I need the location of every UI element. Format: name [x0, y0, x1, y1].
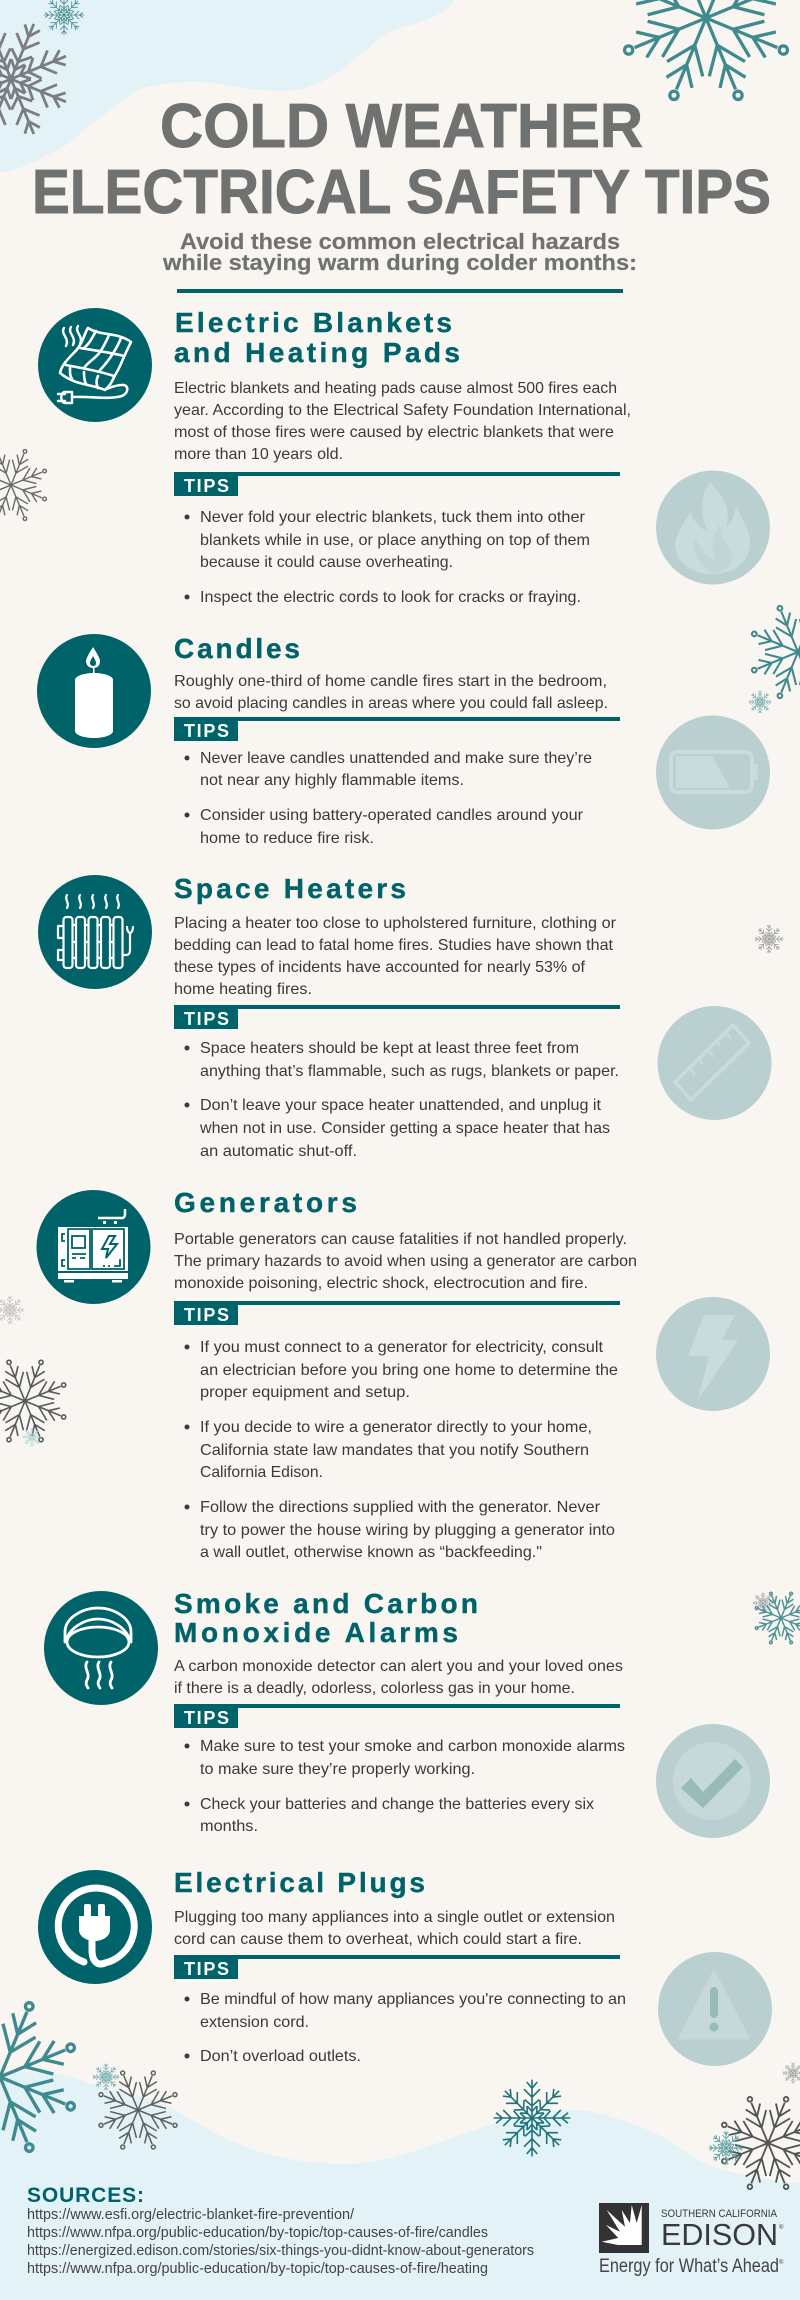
snowflake: right small grey upper [752, 1592, 774, 1614]
body text: Portable generators can cause fatalities if not handled properly. [174, 1231, 627, 1248]
tips list: proper equipment and setup. [200, 1384, 410, 1401]
snowflake: right small teal [748, 690, 772, 714]
snowflake: far right small grey [782, 2062, 800, 2084]
tips list: to make sure they’re properly working. [200, 1761, 475, 1778]
snowflake: top right teal [591, 0, 800, 133]
body text: so avoid placing candles in areas where you could fall asleep. [174, 695, 608, 712]
tips label: TIPS [184, 1959, 229, 1979]
heading: Electrical Plugs [174, 1867, 425, 1898]
tips list: anything that’s flammable, such as rugs, blankets or paper. [200, 1063, 619, 1080]
tips label [174, 1704, 620, 1728]
tips list [184, 1040, 619, 1160]
tips list: Follow the directions supplied with the generator. Never [200, 1499, 601, 1516]
tips list [184, 1339, 618, 1561]
icon: generator [36, 1190, 150, 1304]
snowflake: bottom grey [83, 2055, 193, 2165]
body text: Roughly one-third of home candle fires start in the bedroom, [174, 673, 607, 690]
panel: electric blankets [38, 307, 770, 606]
tips label: TIPS [184, 721, 229, 741]
tips list: months. [200, 1818, 258, 1835]
snowflake: right teal [733, 587, 800, 717]
panel: electrical plugs [38, 1867, 772, 2066]
sources: https://www.nfpa.org/public-education/by-topic/top-causes-of-fire/heating [27, 2261, 488, 2277]
tips list: not near any highly flammable items. [200, 772, 464, 789]
tips label [174, 1955, 620, 1979]
snowflake: bottom middle teal [494, 2080, 570, 2156]
tips list: Inspect the electric cords to look for cracks or fraying. [200, 589, 581, 606]
tips list: California state law mandates that you notify Southern [200, 1442, 589, 1459]
logo: Southern California Edison: SOUTHERN CALIFORNIA [661, 2208, 778, 2220]
body text: year. According to the Electrical Safety Foundation International, [174, 402, 631, 419]
icon: plug [38, 1870, 152, 1984]
body text: most of those fires were caused by electric blankets that were [174, 424, 614, 441]
tips list: Space heaters should be kept at least three feet from [200, 1040, 579, 1057]
tips label: TIPS [184, 1305, 229, 1325]
logo: Southern California Edison [599, 2203, 784, 2277]
tips list: an automatic shut-off. [200, 1143, 357, 1160]
body text: these types of incidents have accounted for nearly 53% of [174, 959, 586, 976]
body text: Plugging too many appliances into a single outlet or extension [174, 1909, 615, 1926]
icon: candle [37, 634, 151, 748]
body text [174, 673, 608, 712]
panel: generators [36, 1187, 770, 1561]
heading: Smoke and Carbon [174, 1588, 478, 1619]
panel: space heaters [38, 873, 772, 1160]
tips list: when not in use. Consider getting a space heater that has [199, 1120, 610, 1137]
body text: A carbon monoxide detector can alert you and your loved ones [174, 1658, 623, 1675]
tips label [174, 472, 620, 496]
tips list: because it could cause overheating. [200, 554, 453, 571]
tips label [174, 717, 620, 741]
tips list: Consider using battery-operated candles around your [200, 807, 584, 824]
subtitle [162, 229, 637, 275]
body text: home heating fires. [174, 981, 312, 998]
background: bottom blue wave [0, 2072, 800, 2300]
heading: Candles [174, 633, 300, 664]
logo: Southern California Edison: EDISON [661, 2217, 778, 2252]
icon: smoke alarm [44, 1591, 158, 1705]
tips label: TIPS [184, 1708, 229, 1728]
snowflake: right small grey [755, 925, 783, 953]
tips list: a wall outlet, otherwise known as “backfeeding." [200, 1544, 542, 1561]
tips label [174, 1005, 620, 1029]
icon: warning triangle [658, 1952, 772, 2066]
snowflake: bottom left teal [0, 1972, 105, 2182]
tips list: Never fold your electric blankets, tuck them into other [200, 509, 586, 526]
tips list [184, 509, 590, 606]
background: top blue blob [0, 0, 454, 173]
logo: Southern California Edison: ® [779, 2224, 784, 2231]
tips list: Be mindful of how many appliances you're connecting to an [200, 1991, 626, 2008]
tips list: Never leave candles unattended and make sure they’re [200, 750, 592, 767]
icon: flame [656, 470, 770, 584]
snowflake: left small teal [22, 1427, 42, 1447]
heading: Monoxide Alarms [174, 1617, 458, 1648]
body text: Electric blankets and heating pads cause almost 500 fires each [174, 380, 617, 397]
heading: Generators [174, 1187, 357, 1218]
snowflake: bottom small teal [93, 2064, 119, 2090]
tips list: California Edison. [200, 1464, 323, 1481]
title [32, 92, 771, 227]
body text: Placing a heater too close to upholstered furniture, clothing or [174, 915, 617, 932]
icon: radiator [38, 875, 152, 989]
heading [174, 307, 460, 368]
tips list: Make sure to test your smoke and carbon monoxide alarms [200, 1738, 625, 1755]
body text [174, 1231, 637, 1292]
snowflake: bottom right small teal [709, 2131, 743, 2165]
icon: lightning bolt [656, 1297, 770, 1411]
tips list: try to power the house wiring by plugging a generator into [200, 1522, 615, 1539]
body text: bedding can lead to fatal home fires. Studies have shown that [174, 937, 614, 954]
subtitle: Avoid these common electrical hazards [180, 229, 620, 254]
icon: check mark [656, 1724, 770, 1838]
heading: and Heating Pads [174, 337, 460, 368]
heading: Electric Blankets [175, 307, 452, 338]
body text: The primary hazards to avoid when using a generator are carbon [174, 1253, 637, 1270]
tips list: Check your batteries and change the batteries every six [200, 1796, 594, 1813]
sources: https://www.esfi.org/electric-blanket-fire-prevention/ [27, 2207, 355, 2223]
snowflake: left grey [0, 435, 61, 535]
tips list: If you must connect to a generator for electricity, consult [200, 1339, 604, 1356]
body text: cord can cause them to overheat, which could start a fire. [174, 1931, 582, 1948]
tips label: TIPS [184, 476, 229, 496]
tips list: an electrician before you bring one home to determine the [200, 1362, 618, 1379]
heading: Space Heaters [174, 873, 406, 904]
snowflake: right teal lower [745, 1582, 800, 1654]
tips list: If you decide to wire a generator directly to your home, [200, 1419, 592, 1436]
snowflake: top left grey [0, 1, 89, 157]
icon: electric blanket [38, 308, 152, 422]
body text [174, 1658, 623, 1697]
sources [27, 2184, 534, 2277]
tips label: TIPS [184, 1009, 229, 1029]
sources: SOURCES: [27, 2184, 144, 2207]
snowflake: bottom right grey [703, 2078, 800, 2208]
panel: alarms [44, 1588, 770, 1838]
heading [174, 1588, 478, 1648]
tips label [174, 1301, 620, 1325]
tips list: blankets while in use, or place anything on top of them [200, 532, 590, 549]
tips list [184, 750, 592, 847]
icon: ruler [658, 1006, 772, 1120]
body text [174, 380, 631, 463]
body text: more than 10 years old. [174, 446, 343, 463]
body text [174, 915, 617, 998]
body text: if there is a deadly, odorless, colorless gas in your home. [174, 1680, 575, 1697]
tips list [184, 1738, 625, 1835]
tips list: home to reduce fire risk. [200, 830, 374, 847]
sources: https://energized.edison.com/stories/six-things-you-didnt-know-about-generators [27, 2243, 534, 2259]
body text: monoxide poisoning, electric shock, electrocution and fire. [174, 1275, 588, 1292]
subtitle: while staying warm during colder months: [162, 250, 637, 275]
panel: candles [37, 633, 770, 847]
icon: battery [656, 716, 770, 830]
body text [174, 1909, 615, 1948]
title: COLD WEATHER [160, 92, 643, 161]
snowflake: left large grey [0, 1344, 82, 1458]
tips list [184, 1991, 626, 2065]
tips list: extension cord. [200, 2014, 309, 2031]
sources: https://www.nfpa.org/public-education/by-topic/top-causes-of-fire/candles [27, 2225, 488, 2241]
snowflake: top small teal [44, 0, 84, 35]
tips list: Don’t overload outlets. [200, 2048, 361, 2065]
logo: Southern California Edison: ® [779, 2259, 784, 2266]
tips list: Don’t leave your space heater unattended, and unplug it [200, 1097, 602, 1114]
snowflake: left small grey [0, 1296, 24, 1324]
